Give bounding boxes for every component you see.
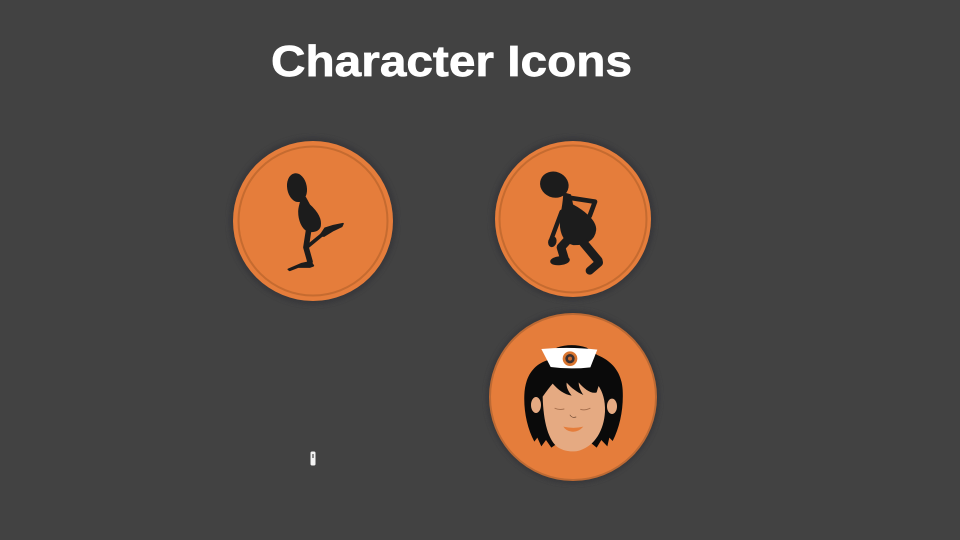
eyes, nose and mouth xyxy=(555,408,590,410)
ears xyxy=(531,397,541,413)
small white marker xyxy=(310,452,316,466)
title: Character Icons xyxy=(271,37,632,86)
face xyxy=(543,382,605,451)
nurse cap xyxy=(541,348,597,368)
icon: nurse face xyxy=(486,310,660,484)
icon: hunched pot-bellied figure xyxy=(491,137,655,301)
icon: bent figure kicking xyxy=(229,137,397,305)
hair xyxy=(524,345,623,448)
